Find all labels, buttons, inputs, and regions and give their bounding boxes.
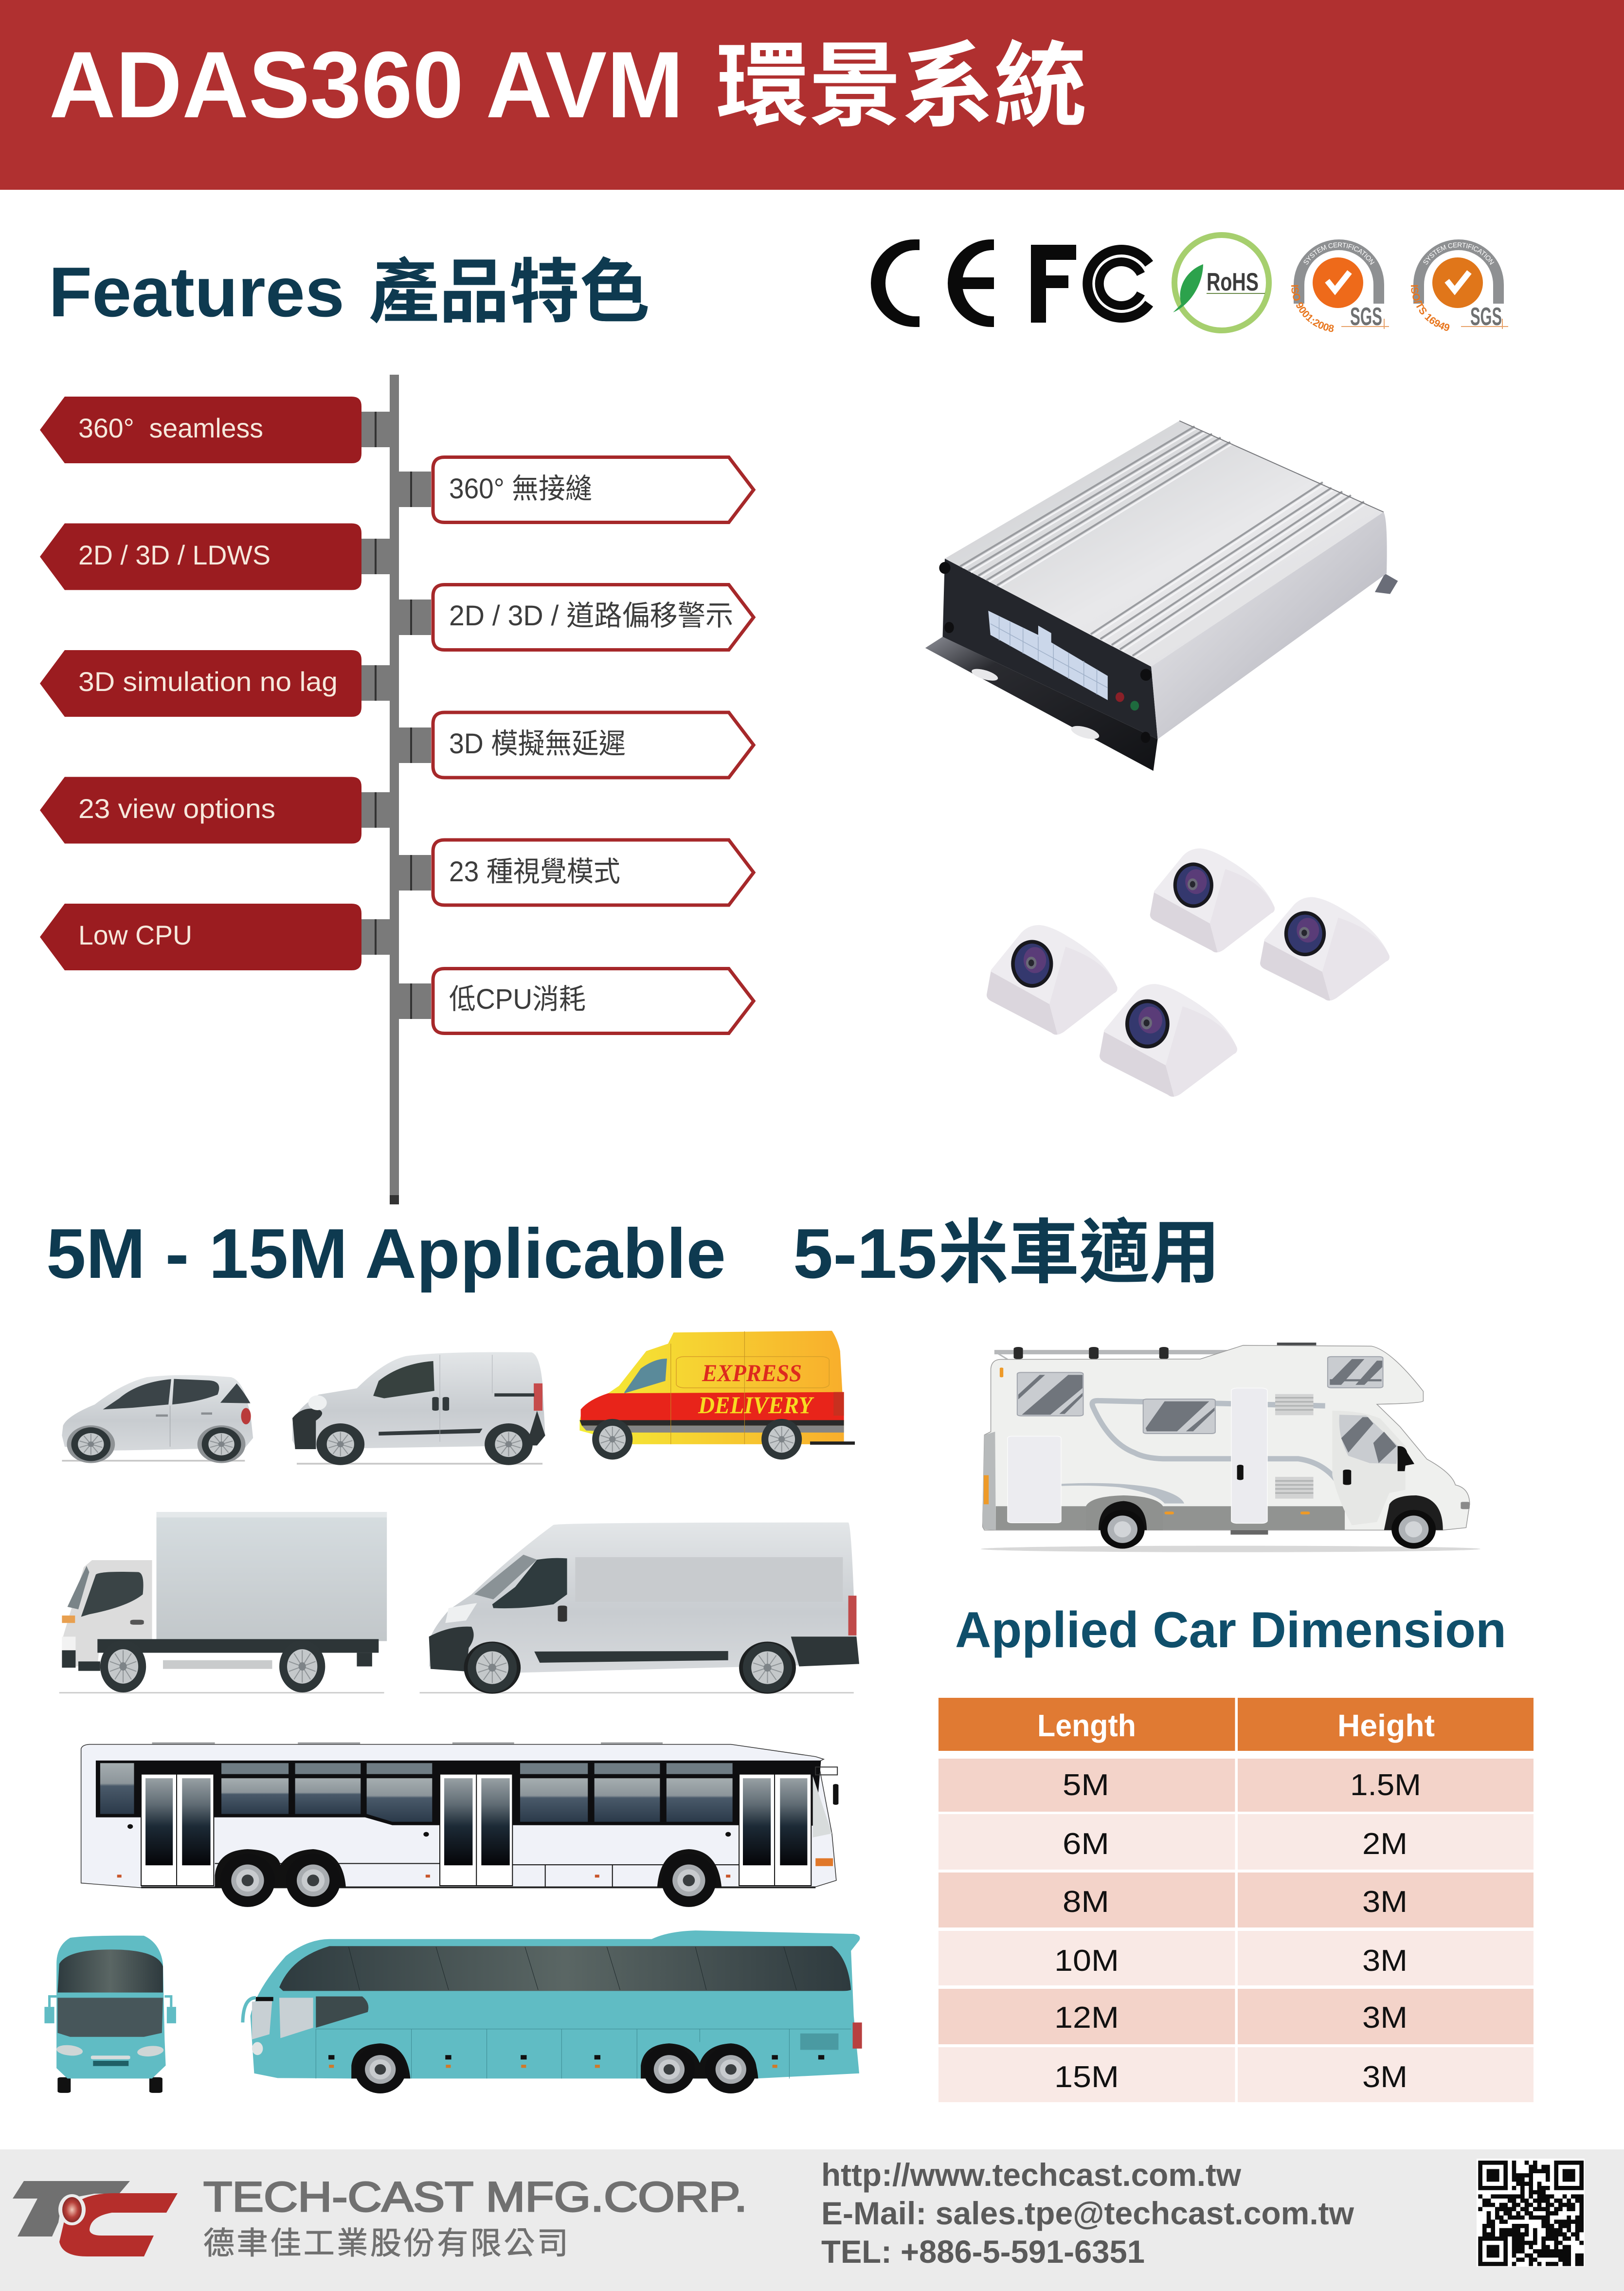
- sign: 2D / 3D / LDWS: 2D / 3D / LDWS: [78, 540, 271, 570]
- van lettering: [698, 1359, 814, 1418]
- camera: right: [1260, 897, 1389, 1000]
- vehicle: yellow delivery van: [579, 1331, 855, 1459]
- table row: 12M: 12M: [1054, 2001, 1119, 2035]
- icon: ISO/TS 16949 SGS: ISO/TS 16949: [1411, 285, 1450, 331]
- camera: front: [1100, 984, 1237, 1097]
- vehicle: coach front view: [44, 1936, 176, 2093]
- table row: 6M: [938, 1814, 1534, 1870]
- heading: features: 產品特色: [369, 253, 650, 331]
- contact details: TEL: +886-5-591-6351: [821, 2234, 1145, 2270]
- icon: ISO/TS 16949 SGS: SYSTEM CERTIFICATION: [1424, 242, 1495, 265]
- company name: 德聿佳工業股份有限公司: [203, 2226, 568, 2261]
- sign: 360 無接縫: 360° 無接縫: [449, 473, 592, 505]
- icon: ISO 9001 SGS: SYSTEM CERTIFICATION: [1304, 242, 1375, 265]
- sign: 3D simulation no lag: 3D simulation no lag: [78, 666, 338, 697]
- table header: Height: [1337, 1708, 1435, 1743]
- title: [49, 32, 1087, 138]
- icon: ISO 9001 SGS: ISO 9001:2008: [1291, 285, 1334, 332]
- vehicles: cars, vans and truck: [59, 1331, 859, 1694]
- vehicle: hatchback car: [62, 1375, 253, 1463]
- header band: [0, 0, 1624, 190]
- vehicle: box truck: [59, 1512, 387, 1693]
- table row: 10M: [938, 1931, 1534, 1985]
- table row: 6M: 2M: [1362, 1827, 1407, 1861]
- table row: 15M: 3M: [1362, 2060, 1407, 2094]
- title: ADAS360 AVM: [49, 32, 684, 138]
- table row: 8M: 8M: [1063, 1885, 1109, 1919]
- sign: 3D 模擬無延遲: 3D 模擬無延遲: [449, 728, 626, 760]
- sign: 低CPU消耗: [399, 968, 754, 1034]
- icon: ISO/TS 16949 SGS: [1411, 239, 1508, 331]
- table row: 8M: 3M: [1362, 1885, 1407, 1919]
- heading: features: Features: [49, 253, 344, 331]
- heading: applied car dimension: Applied Car Dimension: [955, 1602, 1506, 1658]
- camera: left: [987, 925, 1118, 1035]
- icon: CE mark: [871, 239, 994, 327]
- table row: 5M: 1.5M: [1350, 1768, 1421, 1802]
- van lettering: DELIVERY: [698, 1391, 814, 1418]
- table row: 5M: 5M: [1063, 1768, 1109, 1802]
- table header: Length: [1037, 1708, 1136, 1743]
- heading: applicable length: 5-15: [793, 1214, 937, 1293]
- icon: ISO/TS 16949 SGS: SGS: [1470, 303, 1502, 331]
- company logo: [13, 2181, 178, 2256]
- product photo: four cameras: [987, 848, 1389, 1097]
- contact details: E-Mail: sales.tpe@techcast.com.tw: [821, 2195, 1354, 2231]
- van lettering: EXPRESS: [702, 1359, 802, 1386]
- sign: 360 seamless: 360° seamless: [78, 413, 263, 443]
- vehicle: large van: [420, 1523, 859, 1694]
- sign: 2D / 3D / LDWS: [40, 524, 390, 590]
- company name: [203, 2174, 747, 2261]
- QR code: [1477, 2159, 1585, 2267]
- company name: TECH-CAST MFG.CORP.: [203, 2174, 747, 2220]
- icon: RoHS: RoHS: [1207, 268, 1259, 296]
- table row: 15M: [938, 2047, 1534, 2102]
- table row: 10M: 3M: [1362, 1944, 1407, 1978]
- sign: 360 seamless: [40, 397, 390, 463]
- title: 環景系統: [716, 35, 1087, 138]
- table header: [938, 1698, 1534, 1751]
- vehicle: coach side view: [243, 1930, 862, 2093]
- signpost pole: [390, 375, 399, 1204]
- heading: applicable length: [46, 1214, 1220, 1293]
- sign: 2D / 3D / 道路偏移警示: 2D / 3D / 道路偏移警示: [449, 600, 733, 632]
- footer band: [0, 2149, 1624, 2291]
- vehicles: buses: [44, 1742, 862, 2093]
- sign: 23 種視覺模式: [399, 840, 754, 905]
- vehicle: motorhome: [981, 1343, 1480, 1552]
- sign: 低CPU消耗: 低CPU消耗: [449, 983, 586, 1015]
- table row: 5M: [938, 1759, 1534, 1812]
- product photo: AVM control box: [925, 421, 1398, 771]
- table row: 10M: 10M: [1054, 1944, 1119, 1978]
- sign: 23 view options: 23 view options: [78, 793, 275, 824]
- contact details: [821, 2157, 1354, 2270]
- table row: 8M: [938, 1873, 1534, 1927]
- sign: 23 view options: [40, 777, 390, 844]
- icon: RoHS: [1173, 235, 1269, 330]
- sign: 2D / 3D / 道路偏移警示: [399, 585, 754, 650]
- sign: Low CPU: Low CPU: [78, 920, 192, 950]
- sign: Low CPU: [40, 904, 390, 970]
- sign: 23 種視覺模式: 23 種視覺模式: [449, 856, 620, 888]
- icon: ISO 9001 SGS: [1291, 239, 1389, 332]
- table: car dimensions: [938, 1698, 1534, 2102]
- icon: ISO 9001 SGS: SGS: [1350, 303, 1382, 331]
- table row: 12M: 3M: [1362, 2001, 1407, 2035]
- camera: back: [1150, 848, 1275, 952]
- signpost diagram: [40, 375, 754, 1204]
- heading: applicable length: 5M - 15M Applicable: [46, 1214, 726, 1293]
- sign: 360 無接縫: [399, 457, 754, 523]
- vehicle: small van: [292, 1352, 545, 1465]
- heading: applicable length: 米車適用: [938, 1214, 1220, 1292]
- sign: 3D 模擬無延遲: [399, 712, 754, 778]
- heading: features: [49, 253, 650, 331]
- sign: 3D simulation no lag: [40, 650, 390, 717]
- table row: 6M: 6M: [1063, 1827, 1109, 1861]
- certification logos: [871, 232, 1508, 333]
- table row: 15M: 15M: [1054, 2060, 1119, 2094]
- icon: FCC mark: [1031, 245, 1149, 323]
- contact details: http://www.techcast.com.tw: [821, 2157, 1242, 2193]
- vehicle: city bus: [81, 1742, 838, 1907]
- table row: 12M: [938, 1989, 1534, 2044]
